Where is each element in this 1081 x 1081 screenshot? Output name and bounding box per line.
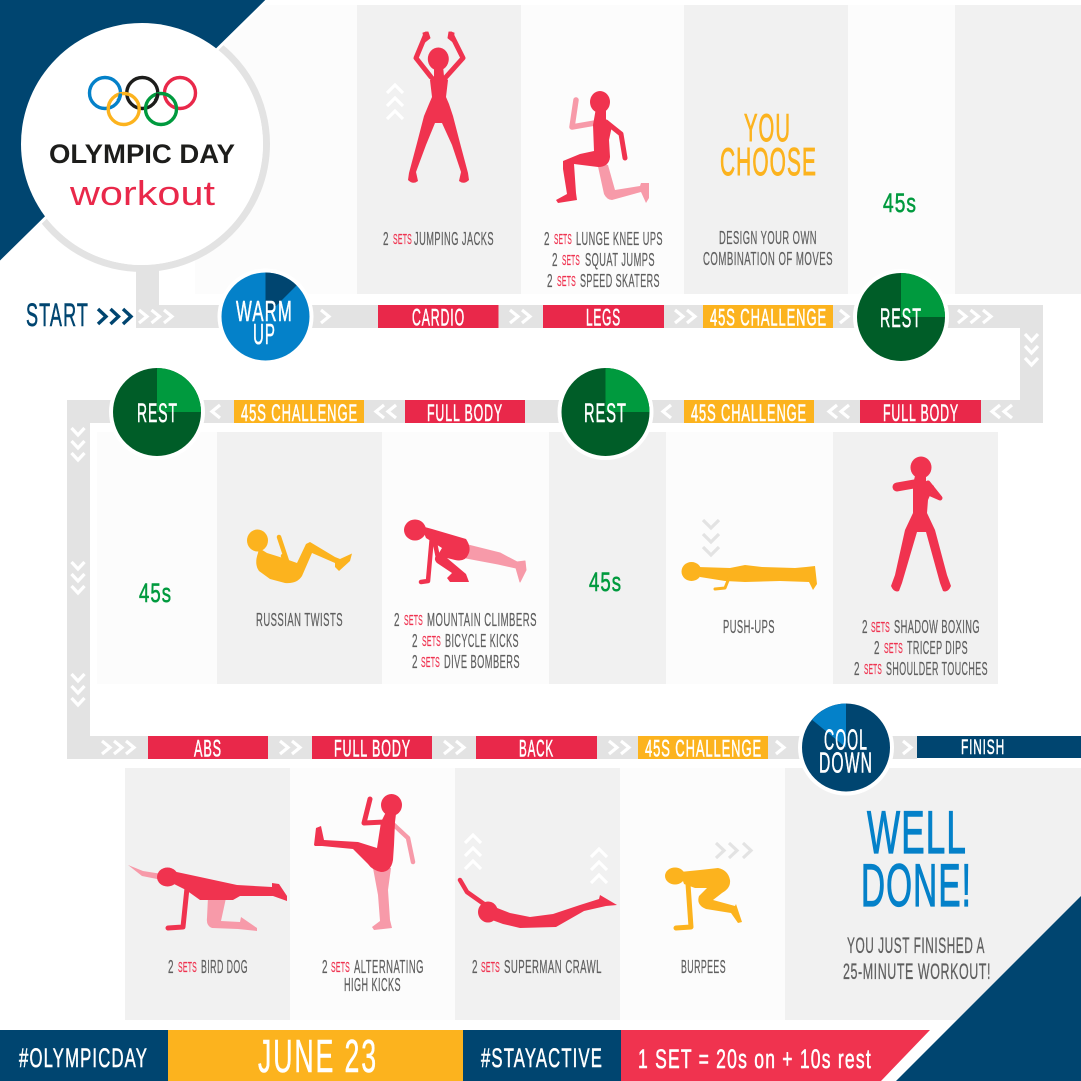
text: full body exercises: 2 bbox=[394, 610, 400, 630]
text: finished bbox=[843, 933, 991, 984]
text: legs exercises: SQUAT JUMPS bbox=[585, 250, 655, 270]
text: legs exercises bbox=[544, 229, 663, 291]
footer: olympicday hashtag: #OLYMPICDAY bbox=[19, 1043, 148, 1073]
down chevrons bbox=[703, 520, 719, 555]
badge: warm up: WARM bbox=[236, 296, 293, 328]
badge: warm up: UP bbox=[253, 319, 276, 351]
panel: jumping jacks bbox=[383, 32, 494, 249]
label: 45s challenge row 2 left bbox=[234, 400, 364, 427]
panel: burpees bbox=[665, 843, 751, 977]
panel: russian twists bbox=[247, 530, 352, 630]
text: superman: SETS bbox=[481, 960, 500, 976]
label: cardio bbox=[378, 304, 498, 332]
text: jumping jacks: JUMPING JACKS bbox=[414, 229, 494, 249]
text: full body exercises: 2 bbox=[412, 631, 418, 651]
path chevrons bbox=[72, 310, 1038, 754]
badge: rest 2: REST bbox=[584, 398, 627, 428]
olympic rings bbox=[90, 78, 196, 124]
panel: abs: BIRD DOG bbox=[201, 957, 248, 977]
label: finish bbox=[917, 735, 1081, 759]
text: superman: 2 bbox=[472, 957, 478, 977]
footer: olympicday hashtag bbox=[0, 1030, 168, 1081]
text: full body exercises right: 2 bbox=[854, 659, 860, 679]
text: legs exercises: SETS bbox=[554, 232, 572, 248]
rest time 2: 45s bbox=[589, 567, 622, 597]
text: jumping jacks: SETS bbox=[393, 232, 412, 248]
rest time 1: 45s bbox=[883, 188, 917, 218]
panel: abs bbox=[128, 865, 287, 977]
text: full body exercises: SETS bbox=[422, 634, 441, 650]
navy corner triangle bbox=[0, 0, 272, 268]
text: high kicks: HIGH KICKS bbox=[344, 975, 401, 995]
panel: legs bbox=[544, 91, 663, 291]
text: full body exercises right: 2 bbox=[874, 638, 880, 658]
text: high kicks: ALTERNATING bbox=[354, 957, 424, 977]
text: legs exercises: SETS bbox=[557, 274, 576, 290]
text: full body exercises right bbox=[854, 617, 988, 679]
figure: push-ups bbox=[682, 562, 817, 590]
text: full body exercises: SETS bbox=[404, 613, 423, 629]
footer: stayactive hashtag bbox=[463, 1030, 621, 1081]
label: 45s challenge row 2 right: 45S CHALLENGE bbox=[691, 400, 807, 427]
text: full body exercises right: 2 bbox=[862, 617, 868, 637]
text: legs exercises: SPEED SKATERS bbox=[580, 271, 660, 291]
label: abs bbox=[148, 736, 268, 762]
badge: rest 3: REST bbox=[137, 398, 178, 428]
label: cardio: CARDIO bbox=[412, 304, 465, 332]
text: full body exercises: 2 bbox=[412, 652, 418, 672]
text: legs exercises: 2 bbox=[544, 229, 550, 249]
panel: push-ups bbox=[682, 520, 817, 637]
text: full body exercises right: SETS bbox=[884, 641, 903, 657]
badge: rest 1 bbox=[853, 269, 949, 365]
navy bottom-right triangle bbox=[896, 896, 1081, 1081]
label: full body left bbox=[405, 400, 525, 427]
up chevrons left bbox=[465, 835, 481, 869]
label: full body row 3 bbox=[312, 736, 432, 762]
figure: bird dog bbox=[128, 865, 287, 931]
up chevrons right bbox=[591, 849, 607, 883]
footer: date: JUNE 23 bbox=[258, 1030, 378, 1081]
label: back bbox=[476, 736, 597, 762]
panel: high kicks bbox=[314, 794, 424, 995]
text: bird dog: SETS bbox=[178, 960, 197, 976]
label: full body right: FULL BODY bbox=[883, 400, 959, 427]
text: legs exercises: LUNGE KNEE UPS bbox=[576, 229, 663, 249]
badge: warm up bbox=[218, 268, 314, 364]
text: russian twists: RUSSIAN TWISTS bbox=[256, 610, 343, 630]
figure: shadow boxing bbox=[891, 456, 951, 591]
figure: high kicks bbox=[314, 794, 413, 930]
figure: burpees bbox=[665, 868, 742, 928]
footer: date bbox=[168, 1030, 463, 1081]
heading: well done bbox=[861, 799, 972, 919]
text: full body exercises bbox=[394, 610, 537, 672]
panel: full body right bbox=[854, 456, 988, 679]
text: full body exercises: MOUNTAIN CLIMBERS bbox=[427, 610, 537, 630]
footer bar bbox=[0, 1030, 930, 1081]
panel: full body left bbox=[394, 520, 537, 672]
logo text: workout: workout bbox=[69, 175, 216, 213]
label: 45s challenge row 2 right bbox=[684, 400, 814, 427]
text: full body exercises: SETS bbox=[421, 655, 440, 671]
label: 45s challenge row 3 bbox=[638, 736, 768, 762]
badge: cool down bbox=[798, 700, 894, 796]
text: full body exercises: DIVE BOMBERS bbox=[444, 652, 520, 672]
text: design your own: DESIGN YOUR OWN bbox=[719, 228, 817, 248]
panels: row 1 backgrounds bbox=[195, 5, 1081, 294]
text: push-ups: PUSH-UPS bbox=[723, 617, 775, 637]
badge: rest 2 bbox=[558, 364, 654, 460]
workout path track bbox=[67, 262, 1043, 759]
label: full body right bbox=[860, 400, 981, 427]
figure: superman bbox=[460, 880, 617, 928]
label: legs bbox=[543, 304, 664, 332]
panel: burpees: BURPEES bbox=[681, 957, 726, 977]
text: superman bbox=[472, 957, 602, 977]
heading: you choose bbox=[720, 107, 817, 184]
panel: back bbox=[460, 835, 617, 977]
figure: jumping jacks bbox=[408, 32, 469, 183]
text: high kicks: SETS bbox=[331, 960, 350, 976]
text: bird dog bbox=[168, 957, 248, 977]
text: bird dog: 2 bbox=[168, 957, 174, 977]
badge: rest 1: REST bbox=[880, 303, 922, 333]
text: full body exercises right: TRICEP DIPS bbox=[907, 638, 968, 658]
label: legs: LEGS bbox=[586, 304, 621, 332]
heading: well done: DONE! bbox=[861, 852, 972, 919]
text: legs exercises: 2 bbox=[552, 250, 558, 270]
logo circle bbox=[21, 23, 263, 265]
label: finish: FINISH bbox=[961, 735, 1005, 759]
text: high kicks bbox=[322, 957, 424, 995]
text: design your own: COMBINATION OF MOVES bbox=[703, 249, 833, 269]
rest time 3: 45s bbox=[139, 578, 172, 608]
badge: cool down: COOL bbox=[824, 724, 868, 756]
label: 45s challenge row 1 bbox=[703, 304, 833, 332]
label: full body left: FULL BODY bbox=[427, 400, 503, 427]
label: full body row 3: FULL BODY bbox=[334, 736, 411, 762]
right chevrons bbox=[716, 843, 751, 858]
text: jumping jacks bbox=[383, 229, 494, 249]
footer: set definition: 1 SET = 20s on + 10s rest bbox=[638, 1044, 872, 1074]
label: back: BACK bbox=[519, 736, 554, 762]
text: full body exercises right: SETS bbox=[864, 662, 882, 678]
text: design your own bbox=[703, 228, 833, 269]
start label: START bbox=[26, 297, 89, 333]
logo ring bbox=[18, 20, 266, 268]
badge: cool down: DOWN bbox=[819, 748, 873, 780]
footer: stayactive hashtag: #STAYACTIVE bbox=[481, 1043, 603, 1073]
panel: well done bbox=[843, 799, 991, 984]
footer: set definition bbox=[621, 1030, 930, 1081]
figure: russian twists bbox=[247, 530, 352, 583]
heading: well done: WELL bbox=[867, 799, 967, 866]
heading: you choose: YOU bbox=[744, 107, 791, 150]
panel: you choose bbox=[703, 107, 833, 269]
text: full body exercises right: SHADOW BOXING bbox=[894, 617, 980, 637]
text: full body exercises right: SETS bbox=[871, 620, 890, 636]
label: 45s challenge row 1: 45S CHALLENGE bbox=[710, 304, 827, 332]
panels: row 2 backgrounds bbox=[97, 432, 998, 684]
text: legs exercises: 2 bbox=[547, 271, 553, 291]
label: 45s challenge row 2 left: 45S CHALLENGE bbox=[241, 400, 358, 427]
text: high kicks: 2 bbox=[322, 957, 328, 977]
badge: rest 3 bbox=[109, 364, 205, 460]
text: full body exercises: BICYCLE KICKS bbox=[445, 631, 519, 651]
panels: row 3 backgrounds bbox=[125, 768, 1081, 1020]
logo text: Olympic Day: OLYMPIC DAY bbox=[49, 139, 235, 169]
up chevrons bbox=[387, 85, 403, 119]
text: legs exercises: SETS bbox=[562, 253, 580, 269]
text: superman: SUPERMAN CRAWL bbox=[504, 957, 602, 977]
label: 45s challenge row 3: 45S CHALLENGE bbox=[645, 736, 762, 762]
text: jumping jacks: 2 bbox=[383, 229, 389, 249]
label: abs: ABS bbox=[194, 736, 222, 762]
figure: mountain climber bbox=[404, 520, 526, 582]
heading: you choose: CHOOSE bbox=[720, 141, 817, 184]
figure: lunge bbox=[556, 91, 649, 203]
